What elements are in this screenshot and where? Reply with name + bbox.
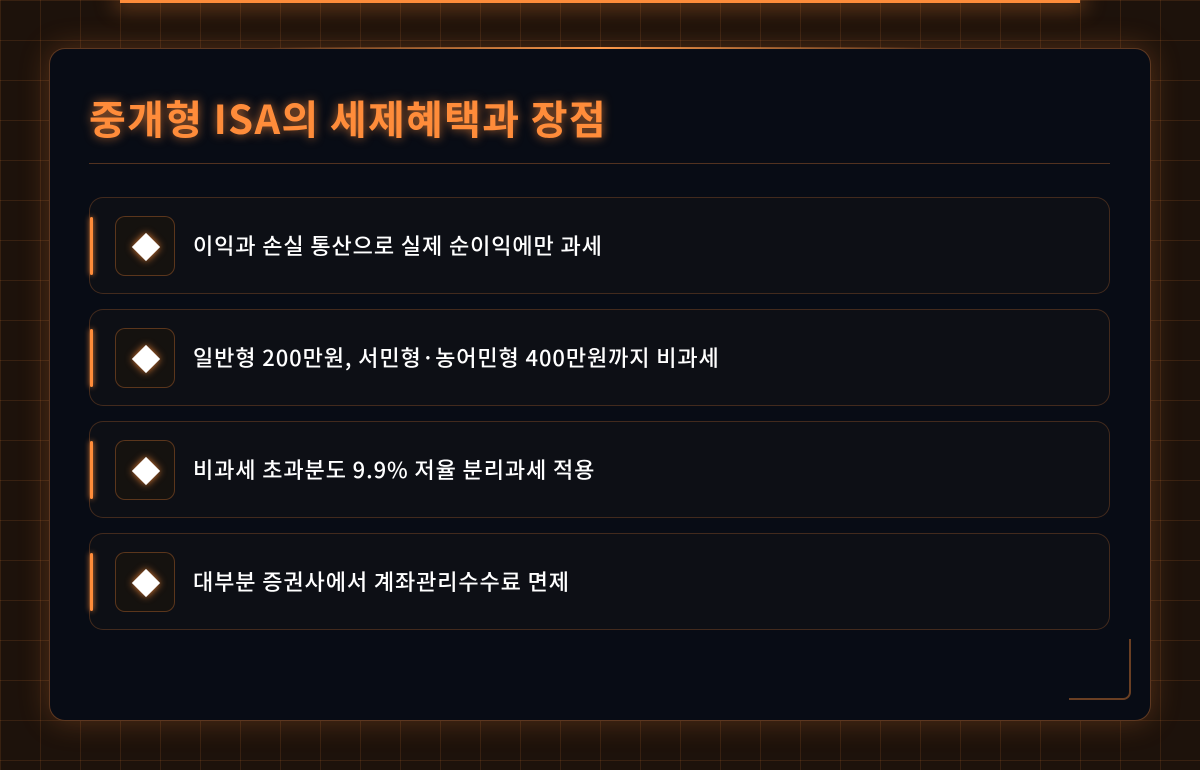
- item 2: 일반형 200만원, 서민형·농어민형 400만원까지 비과세: [193, 341, 720, 373]
- title: 중개형 ISA의 세제혜택과 장점: [89, 88, 607, 146]
- item 1: [89, 197, 1110, 294]
- item 4: 대부분 증권사에서 계좌관리수수료 면제: [193, 565, 570, 597]
- item 3: 비과세 초과분도 9.9% 저율 분리과세 적용: [193, 453, 595, 485]
- item 3: [89, 421, 1110, 518]
- item 1: 이익과 손실 통산으로 실제 순이익에만 과세: [193, 229, 603, 261]
- item 4: [89, 533, 1110, 630]
- item 2: [89, 309, 1110, 406]
